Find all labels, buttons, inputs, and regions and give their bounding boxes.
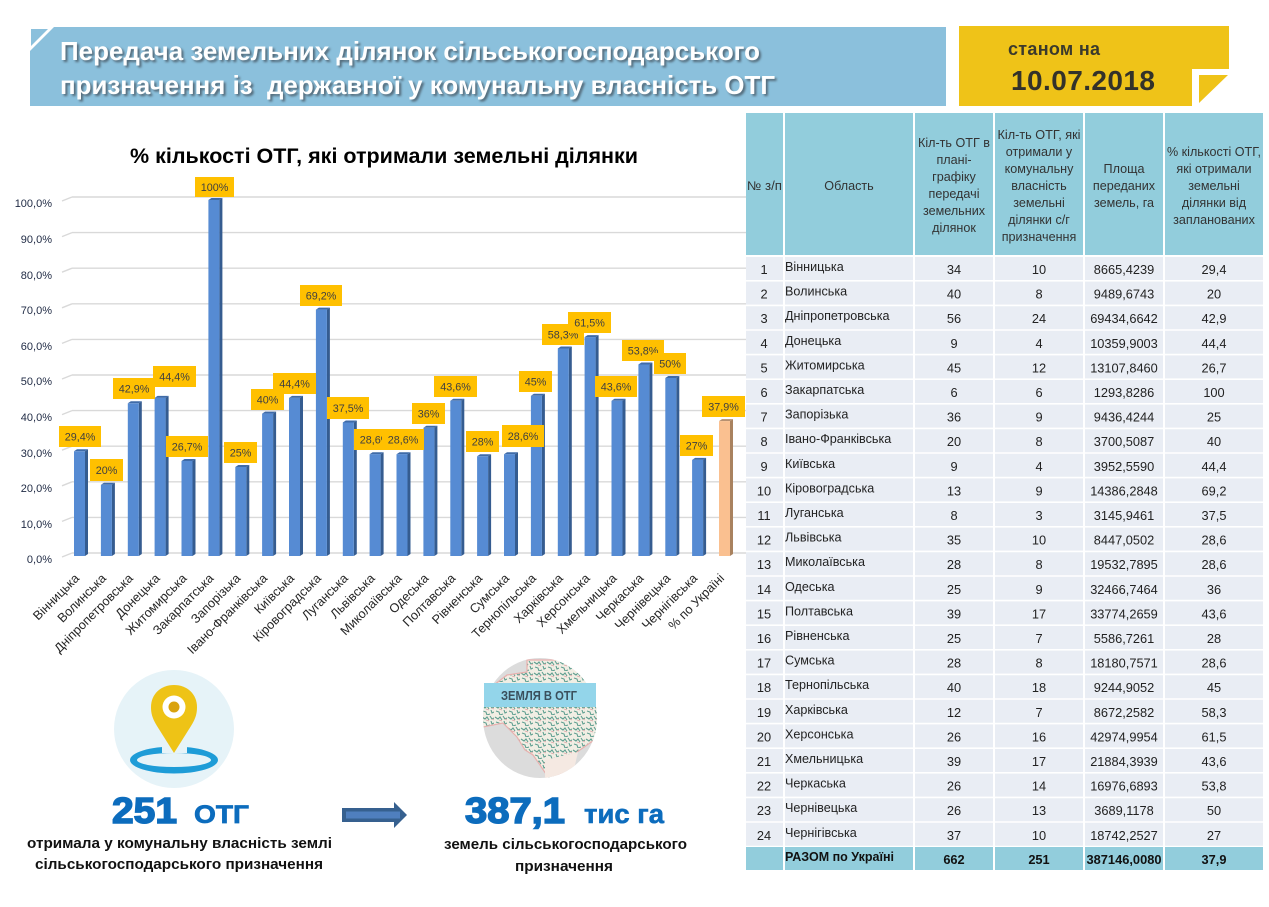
table rows: 50 xyxy=(1207,803,1221,818)
table rows: Закарпатська xyxy=(785,383,864,397)
title text: призначення із державної у комунальну власність ОТГ xyxy=(60,70,775,100)
y axis labels: 30,0% xyxy=(21,448,52,460)
table header: ділянки с/г xyxy=(1008,213,1070,227)
table header: земельних xyxy=(923,204,986,218)
data labels: 44,4% xyxy=(159,372,190,384)
table rows: 34 xyxy=(947,262,961,277)
x axis labels: Кіровоградська xyxy=(251,571,325,645)
data labels: 28,6% xyxy=(508,431,539,443)
table rows: 44,4 xyxy=(1202,336,1226,351)
table rows: 20 xyxy=(1207,287,1221,302)
table rows: Вінницька xyxy=(785,260,844,274)
stat: 387,1 тис га: тис га xyxy=(584,799,665,829)
table header: % кількості ОТГ, xyxy=(1167,145,1261,159)
table rows: 100 xyxy=(1203,385,1225,400)
table rows: 25 xyxy=(947,631,961,646)
table rows: 40 xyxy=(947,680,961,695)
table rows: 14 xyxy=(1032,779,1046,794)
table rows: 17 xyxy=(757,656,771,671)
table rows: 6 xyxy=(760,385,768,400)
table rows: 26,7 xyxy=(1202,360,1226,375)
table rows: 24 xyxy=(757,828,771,843)
table rows: 9 xyxy=(950,336,958,351)
table rows: 14386,2848 xyxy=(1090,483,1158,498)
table rows: Сумська xyxy=(785,654,835,668)
table header: ділянки від xyxy=(1182,196,1247,210)
table rows: 6 xyxy=(950,385,958,400)
table header: земельні xyxy=(1013,196,1065,210)
table rows: 43,6 xyxy=(1202,754,1226,769)
table rows: 12 xyxy=(947,705,961,720)
table rows: 10 xyxy=(1032,533,1046,548)
table rows: Кіровоградська xyxy=(785,481,874,495)
table rows: 27 xyxy=(1207,828,1221,843)
table rows: 28,6 xyxy=(1202,557,1226,572)
table rows: Чернівецька xyxy=(785,801,857,815)
table rows: 20 xyxy=(947,434,961,449)
x axis labels: Хмельницька xyxy=(554,571,620,637)
data labels: 100% xyxy=(201,182,229,194)
table rows: 2 xyxy=(760,287,768,302)
table rows: 13107,8460 xyxy=(1090,360,1158,375)
table rows: 12 xyxy=(757,533,771,548)
table rows: Тернопільська xyxy=(785,678,869,692)
table header: земельні xyxy=(1188,179,1240,193)
table rows: 19532,7895 xyxy=(1090,557,1158,572)
table total row: 387146,0080 xyxy=(1086,852,1162,867)
table rows: 1 xyxy=(760,262,768,277)
table rows: 3700,5087 xyxy=(1094,434,1154,449)
data labels: 20% xyxy=(96,465,118,477)
table rows: Рівненська xyxy=(785,629,849,643)
x axis labels: Вінницька xyxy=(30,571,83,623)
data labels: 43,6% xyxy=(601,382,632,394)
table rows: 13 xyxy=(1032,803,1046,818)
table rows: 5 xyxy=(760,360,768,375)
table header: власність xyxy=(1011,179,1067,193)
table rows: 35 xyxy=(947,533,961,548)
table rows: Чернігівська xyxy=(785,826,857,840)
data labels: 37,9% xyxy=(708,402,739,414)
table rows: 69,2 xyxy=(1202,483,1226,498)
date note: станом на xyxy=(1008,39,1101,59)
x axis labels: Дніпропетровська xyxy=(52,571,137,656)
table rows: 8 xyxy=(1035,434,1043,449)
x axis labels: Одеська xyxy=(386,571,432,616)
data labels: 43,6% xyxy=(440,382,471,394)
table rows: 8 xyxy=(1035,287,1043,302)
x axis labels: Сумська xyxy=(467,571,513,616)
data labels xyxy=(59,177,745,481)
data labels: 53,8% xyxy=(628,346,659,358)
table header: графіку xyxy=(932,170,977,184)
table header: які отримали xyxy=(1176,162,1252,176)
table rows: 16 xyxy=(757,631,771,646)
map label: ЗЕМЛЯ В ОТГ xyxy=(501,689,577,703)
table rows: 8447,0502 xyxy=(1094,533,1154,548)
data labels: 69,2% xyxy=(306,290,337,302)
table rows: 7 xyxy=(760,410,768,425)
data labels: 36% xyxy=(418,408,440,420)
table rows: Луганська xyxy=(785,506,844,520)
icon: land map xyxy=(480,658,600,782)
table header: запланованих xyxy=(1173,213,1256,227)
table rows: 58,3 xyxy=(1202,705,1226,720)
arrow xyxy=(342,802,407,828)
table header: Кіл-ть ОТГ в xyxy=(918,136,990,150)
table rows: 9 xyxy=(1035,410,1043,425)
table rows: Полтавська xyxy=(785,604,853,618)
table rows: Черкаська xyxy=(785,777,846,791)
data labels: 40% xyxy=(257,394,279,406)
table rows: 53,8 xyxy=(1202,779,1226,794)
y axis labels: 40,0% xyxy=(21,412,52,424)
table rows: 44,4 xyxy=(1202,459,1226,474)
y axis labels: 10,0% xyxy=(21,519,52,531)
y axis labels: 90,0% xyxy=(21,234,52,246)
icon: location pin xyxy=(114,670,234,788)
table rows: 16976,6893 xyxy=(1090,779,1158,794)
table rows: 6 xyxy=(1035,385,1043,400)
table rows: 26 xyxy=(947,779,961,794)
table header: плані- xyxy=(936,153,972,167)
table rows: 43,6 xyxy=(1202,606,1226,621)
table rows: 8 xyxy=(1035,557,1043,572)
x axis labels: Черкаська xyxy=(593,571,647,624)
table rows: 26 xyxy=(947,803,961,818)
data labels: 27% xyxy=(686,440,708,452)
data labels: 50% xyxy=(659,358,681,370)
table rows xyxy=(746,257,1263,846)
table rows: 28 xyxy=(947,656,961,671)
stat: 251 ОТГ: 251 xyxy=(112,790,177,831)
y axis labels: 60,0% xyxy=(21,341,52,353)
table rows: 56 xyxy=(947,311,961,326)
table rows: 20 xyxy=(757,729,771,744)
x axis labels: Полтавська xyxy=(400,571,459,630)
table rows: 4 xyxy=(1035,336,1043,351)
table rows: Волинська xyxy=(785,285,847,299)
table rows: 18 xyxy=(1032,680,1046,695)
table rows: Запорізька xyxy=(785,408,848,422)
table rows: 13 xyxy=(947,483,961,498)
table rows: Дніпропетровська xyxy=(785,309,890,323)
date note: 10.07.2018 xyxy=(1011,65,1155,96)
table header: Кіл-ть ОТГ, які xyxy=(998,128,1080,142)
table rows: 37 xyxy=(947,828,961,843)
stat caption right xyxy=(444,837,687,875)
table rows: 3 xyxy=(760,311,768,326)
table total row: РАЗОМ по Україні xyxy=(785,850,894,864)
table rows: 36 xyxy=(1207,582,1221,597)
table rows: 25 xyxy=(1207,410,1221,425)
table rows: 11 xyxy=(757,508,771,523)
table header: № з/п xyxy=(747,179,782,193)
x axis labels: Харківська xyxy=(511,571,567,626)
x axis labels: Тернопільська xyxy=(469,571,540,641)
y axis labels xyxy=(15,198,52,566)
table header: ділянок xyxy=(932,221,976,235)
stat caption left: отримала у комунальну власність землі xyxy=(27,836,332,852)
table rows: 3952,5590 xyxy=(1094,459,1154,474)
chart title: % кількості ОТГ, які отримали земельні ділянки xyxy=(130,145,638,168)
data labels: 42,9% xyxy=(119,384,150,396)
table rows: 10 xyxy=(757,483,771,498)
data labels: 58,3% xyxy=(548,330,579,342)
table rows: Донецька xyxy=(785,334,841,348)
stat caption left: сільськогосподарського призначення xyxy=(35,857,323,873)
table rows: 8 xyxy=(1035,656,1043,671)
table rows: 39 xyxy=(947,606,961,621)
table rows: Харківська xyxy=(785,703,848,717)
table rows: 37,5 xyxy=(1202,508,1226,523)
x axis labels: Луганська xyxy=(299,571,352,623)
table rows: 8672,2582 xyxy=(1094,705,1154,720)
data labels: 44,4% xyxy=(279,378,310,390)
bar chart xyxy=(15,177,746,657)
table rows: 4 xyxy=(760,336,768,351)
table rows: 9489,6743 xyxy=(1094,287,1154,302)
table rows: 3 xyxy=(1035,508,1043,523)
table rows: Київська xyxy=(785,457,835,471)
y axis labels: 80,0% xyxy=(21,270,52,282)
y axis labels: 0,0% xyxy=(27,554,52,566)
table rows: 5586,7261 xyxy=(1094,631,1154,646)
x axis labels: Миколаївська xyxy=(338,571,405,638)
table rows: 19 xyxy=(757,705,771,720)
stat: 251 ОТГ: ОТГ xyxy=(194,801,249,829)
table rows: 69434,6642 xyxy=(1090,311,1158,326)
table rows: 32466,7464 xyxy=(1090,582,1158,597)
data labels: 28,6% xyxy=(388,434,419,446)
table rows: 8 xyxy=(760,434,768,449)
table xyxy=(746,113,1263,870)
data labels: 28,6% xyxy=(360,434,391,446)
x axis labels: Чернівецька xyxy=(612,571,674,633)
table rows: 29,4 xyxy=(1202,262,1226,277)
table rows: 16 xyxy=(1032,729,1046,744)
table rows: 28,6 xyxy=(1202,533,1226,548)
y axis labels: 70,0% xyxy=(21,305,52,317)
y axis labels: 100,0% xyxy=(15,198,52,210)
table rows: 26 xyxy=(947,729,961,744)
table rows: 7 xyxy=(1035,705,1043,720)
table rows: 13 xyxy=(757,557,771,572)
x axis labels: Рівненська xyxy=(429,571,486,627)
x axis labels: Волинська xyxy=(55,571,110,625)
table header: отримали у xyxy=(1006,145,1073,159)
table rows: 18742,2527 xyxy=(1090,828,1158,843)
stat: 387,1 тис га: 387,1 xyxy=(465,790,565,831)
data labels: 45% xyxy=(525,376,547,388)
data labels: 61,5% xyxy=(574,318,605,330)
table rows: Львівська xyxy=(785,531,842,545)
table rows: Івано-Франківська xyxy=(785,432,891,446)
table rows: 3689,1178 xyxy=(1094,803,1154,818)
data labels: 29,4% xyxy=(65,432,96,444)
table rows: 7 xyxy=(1035,631,1043,646)
table rows: 21884,3939 xyxy=(1090,754,1158,769)
table total row: 37,9 xyxy=(1202,852,1226,867)
table header: Область xyxy=(824,179,874,193)
table rows: Миколаївська xyxy=(785,555,865,569)
table rows: 45 xyxy=(947,360,961,375)
bars xyxy=(74,198,733,556)
x axis labels: Київська xyxy=(252,571,298,617)
table total row: 662 xyxy=(943,852,965,867)
table rows: 23 xyxy=(757,803,771,818)
table rows: 9 xyxy=(950,459,958,474)
table rows: 28 xyxy=(1207,631,1221,646)
x axis labels xyxy=(30,571,727,657)
y axis labels: 20,0% xyxy=(21,483,52,495)
table rows: 8 xyxy=(950,508,958,523)
table rows: 24 xyxy=(1032,311,1046,326)
table rows: 39 xyxy=(947,754,961,769)
x axis labels: % по Україні xyxy=(666,571,727,633)
title text xyxy=(60,36,775,100)
table rows: 45 xyxy=(1207,680,1221,695)
table rows: 28,6 xyxy=(1202,656,1226,671)
stat caption left xyxy=(27,836,332,873)
stat: 387,1 тис га xyxy=(465,790,665,831)
date note xyxy=(959,26,1229,106)
stat caption right: земель сільськогосподарського xyxy=(444,837,687,853)
table rows: 9436,4244 xyxy=(1094,410,1154,425)
data labels: 37,5% xyxy=(333,403,364,415)
stat: 251 ОТГ xyxy=(112,790,249,831)
table total row: 251 xyxy=(1028,852,1050,867)
data labels: 28% xyxy=(472,436,494,448)
table rows: 10 xyxy=(1032,828,1046,843)
table rows: 36 xyxy=(947,410,961,425)
table header xyxy=(746,113,1263,255)
x axis labels: Львівська xyxy=(328,571,378,621)
x axis labels: Івано-Франківська xyxy=(185,571,271,657)
table rows: 9 xyxy=(760,459,768,474)
table rows: 15 xyxy=(757,606,771,621)
table rows: Херсонська xyxy=(785,727,853,741)
data labels: 25% xyxy=(230,448,252,460)
table rows: 17 xyxy=(1032,606,1046,621)
title banner xyxy=(30,27,946,106)
table rows: 1293,8286 xyxy=(1094,385,1154,400)
table rows: 10359,9003 xyxy=(1090,336,1158,351)
y axis labels: 50,0% xyxy=(21,376,52,388)
table rows: 42974,9954 xyxy=(1090,729,1158,744)
x axis labels: Закарпатська xyxy=(150,571,217,638)
x axis labels: Чернігівська xyxy=(639,571,701,632)
table total row xyxy=(746,847,1263,870)
table rows: 18180,7571 xyxy=(1090,656,1158,671)
table rows: 9 xyxy=(1035,582,1043,597)
table rows: 40 xyxy=(947,287,961,302)
table rows: 14 xyxy=(757,582,771,597)
data labels: 26,7% xyxy=(172,442,203,454)
title text: Передача земельних ділянок сільськогосподарського xyxy=(60,36,760,66)
table header: Площа xyxy=(1104,162,1144,176)
x axis labels: Херсонська xyxy=(534,571,593,630)
table rows: 42,9 xyxy=(1202,311,1226,326)
table rows: 17 xyxy=(1032,754,1046,769)
table rows: 40 xyxy=(1207,434,1221,449)
table rows: 22 xyxy=(757,779,771,794)
table rows: 8665,4239 xyxy=(1094,262,1154,277)
x axis labels: Житомирська xyxy=(123,571,190,638)
table header: передачі xyxy=(928,187,980,201)
table rows: 9244,9052 xyxy=(1094,680,1154,695)
table rows: 3145,9461 xyxy=(1094,508,1154,523)
table rows: 61,5 xyxy=(1202,729,1226,744)
table rows: 4 xyxy=(1035,459,1043,474)
table rows: 12 xyxy=(1032,360,1046,375)
table rows: 10 xyxy=(1032,262,1046,277)
stat caption right: призначення xyxy=(515,859,613,875)
table header: комунальну xyxy=(1005,162,1074,176)
table rows: Житомирська xyxy=(785,358,865,372)
x axis labels: Запорізька xyxy=(188,571,244,626)
table rows: 25 xyxy=(947,582,961,597)
table rows: 21 xyxy=(757,754,771,769)
x axis labels: Донецька xyxy=(113,571,163,621)
table rows: 18 xyxy=(757,680,771,695)
table header: земель, га xyxy=(1094,196,1154,210)
table rows: 9 xyxy=(1035,483,1043,498)
table rows: Одеська xyxy=(785,580,835,594)
table rows: 28 xyxy=(947,557,961,572)
table header: переданих xyxy=(1093,179,1156,193)
table rows: Хмельницька xyxy=(785,752,863,766)
table rows: 33774,2659 xyxy=(1090,606,1158,621)
table header: призначення xyxy=(1002,230,1076,244)
